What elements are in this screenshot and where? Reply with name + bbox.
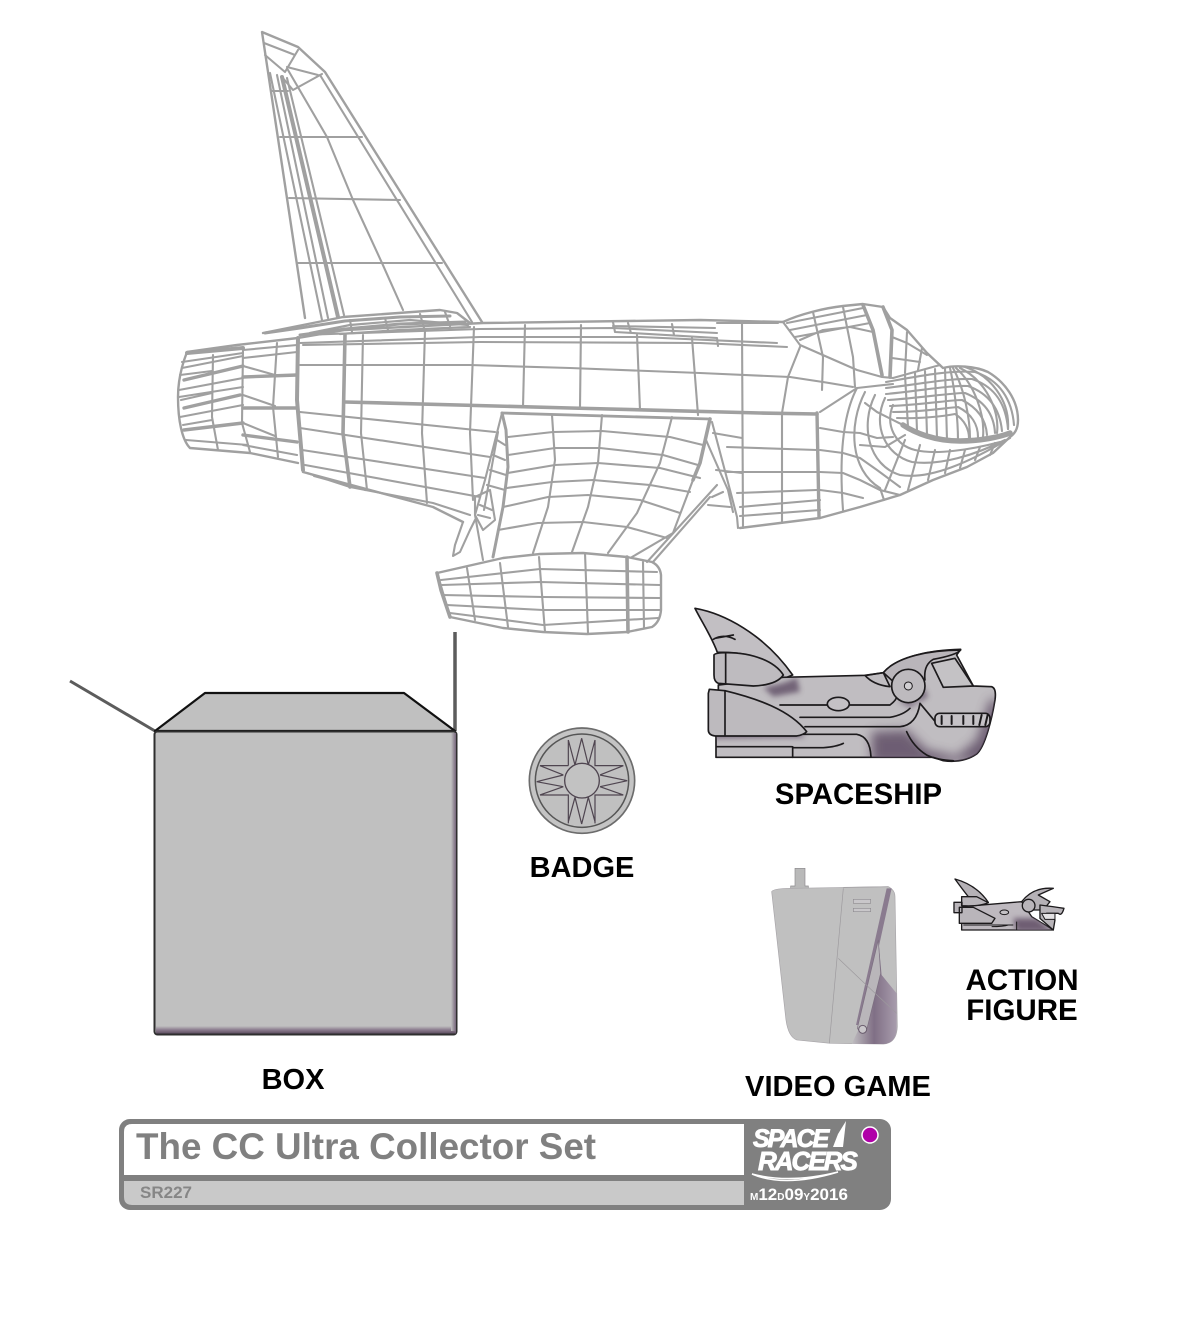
box right flap [453, 632, 457, 731]
infographic canvas [69, 30, 1077, 1210]
console shaded corner [852, 940, 897, 1044]
label: action figure: FIGURE [966, 994, 1078, 1027]
box front face [154, 732, 456, 1034]
spaceship mouth vent [935, 713, 990, 727]
spaceship wheel hub [904, 682, 912, 690]
label: badge: BADGE [530, 852, 634, 884]
spaceship body [716, 649, 995, 761]
console button [859, 1025, 867, 1033]
spaceship illustration [695, 608, 1000, 763]
label: video game: VIDEO GAME [745, 1071, 931, 1103]
figure lines [963, 922, 1017, 930]
label: box: BOX [262, 1064, 325, 1096]
title panel [124, 1124, 744, 1175]
figure engines [954, 897, 995, 923]
spaceship detail lines [713, 635, 953, 761]
label: action figure: ACTION [965, 964, 1079, 997]
console handle [857, 940, 881, 1032]
label: spaceship: SPACESHIP [775, 778, 942, 811]
wireframe wing [453, 413, 738, 562]
box left flap [70, 681, 155, 731]
wireframe dorsal strake [263, 310, 470, 335]
logo: Space Racers: SPACE [753, 1125, 831, 1153]
spaceship upper engine [714, 653, 783, 686]
spaceship fin [695, 608, 793, 680]
spaceship windshield [932, 658, 973, 687]
spaceship body shading [710, 677, 1000, 763]
title bar frame [119, 1119, 891, 1210]
code: SR227 [140, 1183, 192, 1202]
console vents [853, 899, 871, 912]
logo: Space Racers: RACERS [758, 1146, 858, 1176]
icon: badge [529, 728, 635, 833]
spaceship oval hatch [827, 697, 849, 711]
console dark stripe [856, 888, 892, 1025]
title bar [119, 1119, 891, 1210]
logo: Space Racers [752, 1121, 858, 1181]
box [70, 632, 456, 1034]
box back flap [155, 693, 455, 731]
code strip [124, 1181, 744, 1205]
figure teeth [1042, 913, 1055, 919]
spaceship horn [883, 650, 961, 682]
spaceship lower engine [708, 689, 807, 736]
console joystick [791, 868, 808, 889]
figure horn and head [1022, 888, 1053, 910]
console panel lines [829, 887, 897, 1043]
wireframe tail fin [262, 32, 482, 322]
console body [772, 887, 897, 1044]
spaceship wheel [892, 669, 925, 703]
action figure [954, 879, 1064, 932]
figure body [962, 902, 1053, 930]
figure shading [1013, 918, 1053, 932]
figure wheel [1022, 899, 1035, 912]
wireframe engine pod [437, 553, 661, 634]
wireframe cockpit and nose [782, 304, 1018, 518]
box bottom shading [156, 1026, 456, 1034]
date: M12D09Y2016 [750, 1185, 848, 1204]
title: The CC Ultra Collector Set [136, 1126, 596, 1167]
box right shading [451, 733, 456, 1031]
video game console [772, 868, 897, 1044]
status dot [862, 1127, 878, 1143]
wireframe spaceship [178, 32, 1018, 634]
wireframe rear engine [178, 338, 303, 470]
figure hatch [1000, 910, 1009, 915]
wireframe fuselage [298, 320, 820, 528]
figure snout [1040, 905, 1064, 930]
figure fin [955, 879, 988, 902]
